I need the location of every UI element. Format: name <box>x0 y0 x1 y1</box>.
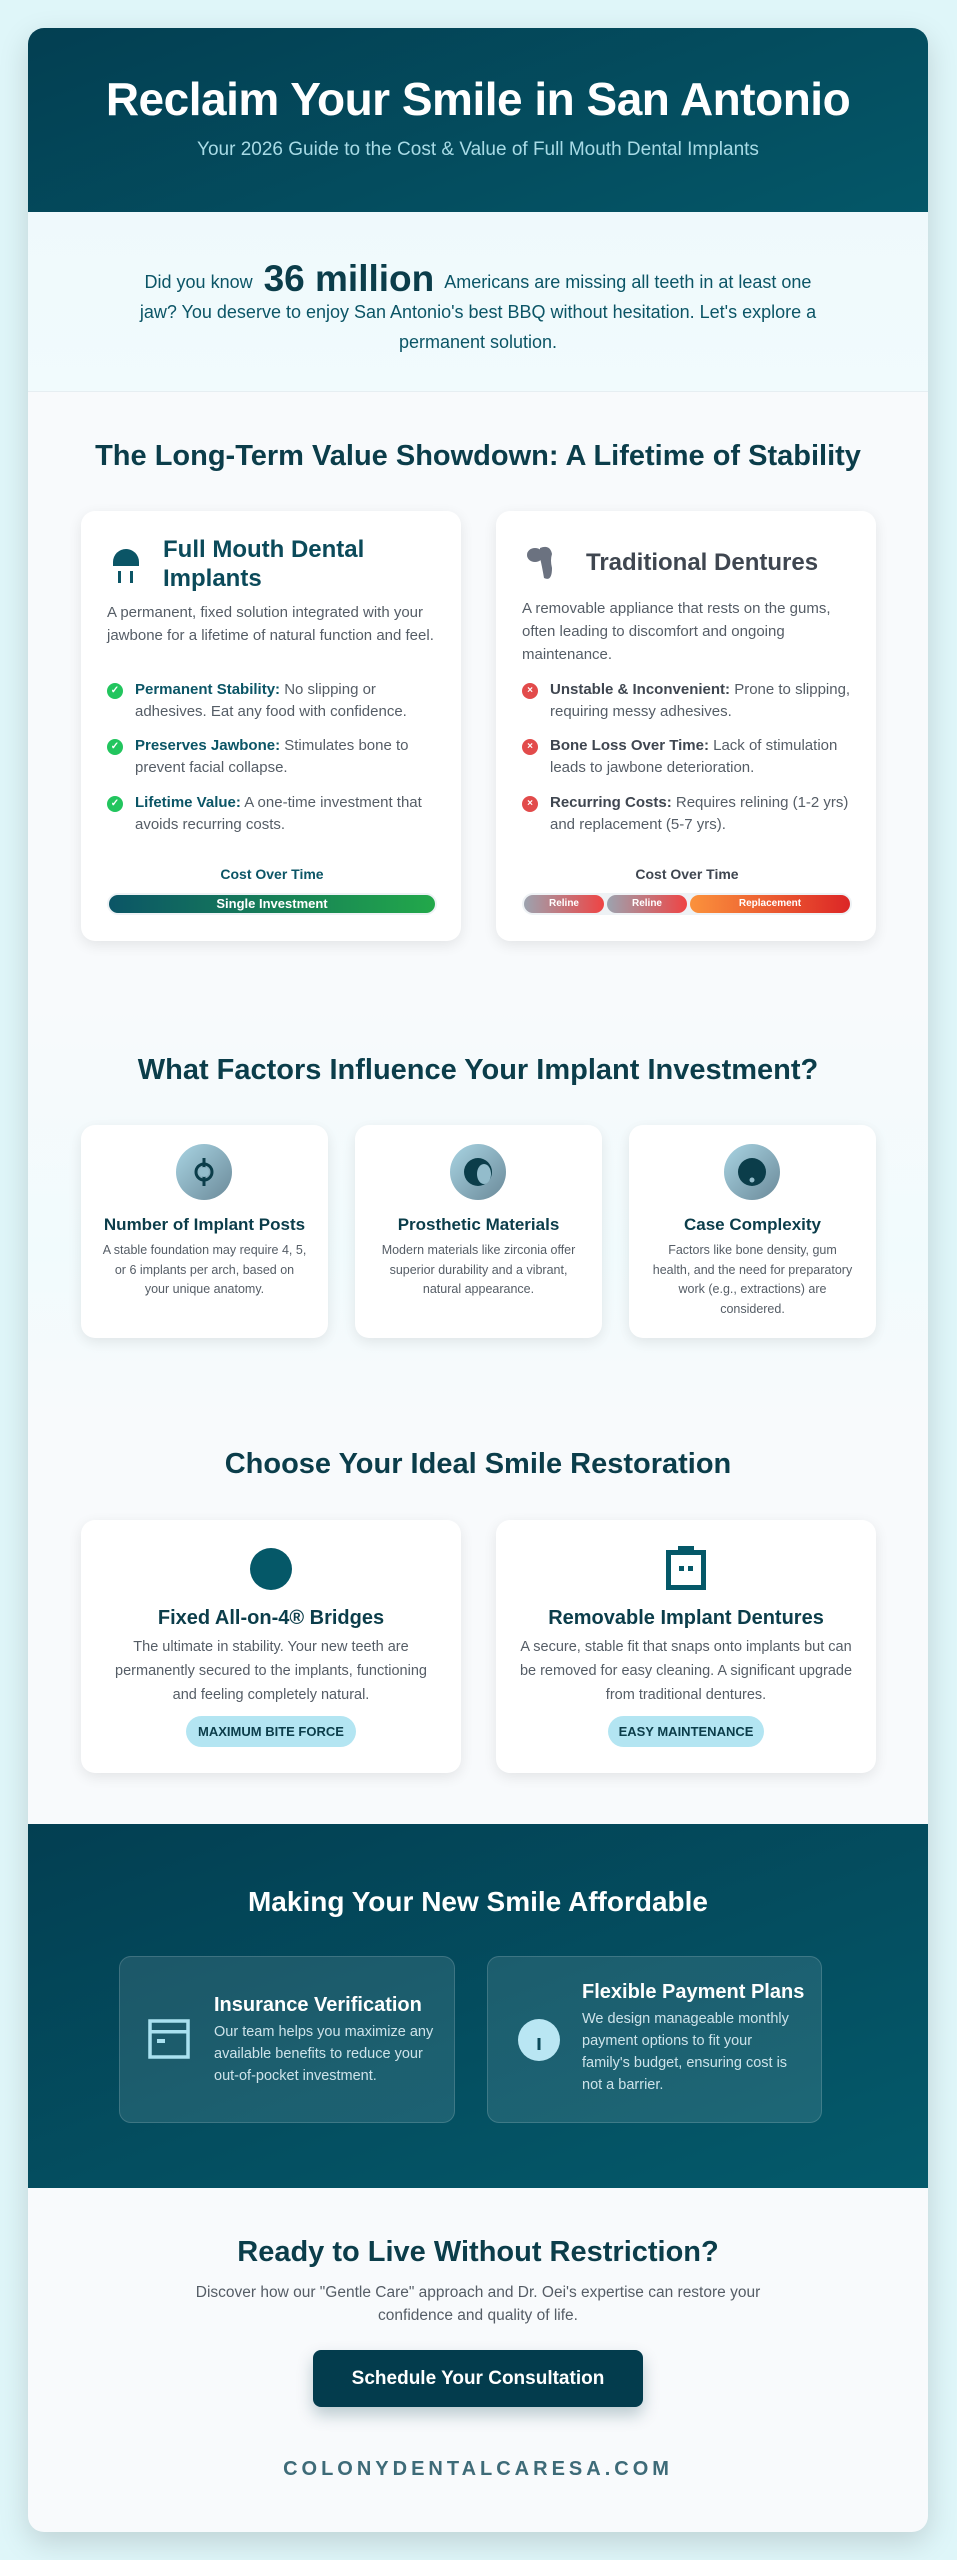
CTA text: Discover how our "Gentle Care" approach and Dr. Oei's expertise can restore your confidence and quality of life. <box>196 2284 760 2324</box>
panel: implants: Lifetime Value: A one-time investment that avoids recurring costs. <box>135 794 422 833</box>
title: Reclaim Your Smile in San Antonio <box>106 73 850 125</box>
description: A removable appliance that rests on the gums, often leading to discomfort and ongoing maintenance. <box>522 600 831 663</box>
icon: circle <box>250 1548 292 1590</box>
title: Flexible Payment Plans <box>582 1981 804 2003</box>
panel: insurance <box>119 1956 455 2123</box>
text: Modern materials like zirconia offer superior durability and a vibrant, natural appearance. <box>382 1243 575 1296</box>
title: Prosthetic Materials <box>398 1215 559 1234</box>
intro section <box>28 212 928 392</box>
text: We design manageable monthly payment options to fit your family's budget, ensuring cost is not a barrier. <box>582 2011 789 2093</box>
cost over time bar: Reline <box>632 898 662 909</box>
section heading: factors: What Factors Influence Your Implant Investment? <box>138 1054 818 1086</box>
title: Case Complexity <box>684 1215 821 1234</box>
title: Insurance Verification <box>214 1994 422 2016</box>
bullet list <box>522 681 850 833</box>
icon <box>176 1144 232 1200</box>
icon: denture <box>527 546 552 579</box>
section heading: restoration: Choose Your Ideal Smile Restoration <box>225 1448 731 1480</box>
cost over time bar <box>107 866 437 915</box>
CTA button <box>313 2350 643 2407</box>
text: Our team helps you maximize any available benefits to reduce your out-of-pocket investment. <box>214 2024 433 2084</box>
bullet list: Bone Loss Over Time: Lack of stimulation leads to jawbone deterioration. <box>550 737 837 776</box>
text: A stable foundation may require 4, 5, or 6 implants per arch, based on your unique anatomy. <box>103 1243 306 1296</box>
title: Fixed All-on-4® Bridges <box>158 1607 384 1629</box>
cost over time bar: Cost Over Time <box>635 866 739 882</box>
text: Factors like bone density, gum health, and the need for preparatory work (e.g., extractions) are considered. <box>653 1243 852 1316</box>
card title: Traditional Dentures <box>586 549 818 576</box>
card title: Full Mouth Dental <box>163 536 364 563</box>
cost over time bar: Cost Over Time <box>220 866 324 882</box>
icon <box>724 1144 780 1200</box>
panel: complexity <box>629 1125 876 1338</box>
title: Removable Implant Dentures <box>548 1607 824 1629</box>
intro text: Did you know 36 million Americans are missing all teeth in at least one jaw? You deserve to enjoy San Antonio's best BBQ without hesitation. Let's explore a permanent solution. <box>140 258 816 352</box>
title: Number of Implant Posts <box>104 1215 305 1234</box>
icon <box>450 1144 506 1200</box>
bullet list: × <box>527 798 533 809</box>
heading: Making Your New Smile Affordable <box>248 1886 708 1917</box>
bullet list: × <box>527 741 533 752</box>
icon: box <box>666 1546 706 1590</box>
panel: implant posts <box>81 1125 328 1338</box>
bullet list: Preserves Jawbone: Stimulates bone to prevent facial collapse. <box>135 737 408 776</box>
affordability section <box>28 1824 928 2188</box>
panel: implants <box>81 511 461 941</box>
CTA heading: Ready to Live Without Restriction? <box>237 2236 719 2268</box>
panel: dentures: Recurring Costs: Requires relining (1-2 yrs) and replacement (5-7 yrs). <box>550 794 848 833</box>
card title: Implants <box>163 565 262 592</box>
description: A permanent, fixed solution integrated with your jawbone for a lifetime of natural function and feel. <box>107 604 434 644</box>
website: COLONYDENTALCARESA.COM <box>283 2458 673 2480</box>
text: A secure, stable fit that snaps onto implants but can be removed for easy cleaning. A significant upgrade from traditional dentures. <box>520 1639 852 1703</box>
badge: EASY MAINTENANCE <box>619 1724 753 1739</box>
badge <box>608 1716 764 1747</box>
cost over time bar: Replacement <box>739 898 801 909</box>
subtitle: Your 2026 Guide to the Cost & Value of Full Mouth Dental Implants <box>197 139 759 160</box>
bullet list: ✓ <box>111 798 119 809</box>
icon: implant <box>113 549 139 583</box>
bullet list: Permanent Stability: No slipping or adhesives. Eat any food with confidence. <box>135 681 407 720</box>
badge <box>186 1716 356 1747</box>
bullet list: ✓ <box>111 685 119 696</box>
bullet list: Unstable & Inconvenient: Prone to slipping, requiring messy adhesives. <box>550 681 850 720</box>
bullet list: × <box>527 685 533 696</box>
panel: removable <box>496 1520 876 1773</box>
card title <box>163 536 364 592</box>
header <box>28 28 928 212</box>
panel: dentures <box>496 511 876 941</box>
bullet list <box>107 681 422 833</box>
cost over time bar <box>522 866 852 915</box>
factors section <box>28 996 928 1424</box>
text: The ultimate in stability. Your new teeth are permanently secured to the implants, functioning and feeling completely natural. <box>115 1639 427 1703</box>
icon: card <box>148 2019 190 2059</box>
CTA button: Schedule Your Consultation <box>352 2368 604 2389</box>
icon: coin <box>518 2019 560 2061</box>
section heading: value showdown: The Long-Term Value Showdown: A Lifetime of Stability <box>95 440 861 472</box>
badge: MAXIMUM BITE FORCE <box>198 1724 344 1739</box>
cost over time bar: Reline <box>549 898 579 909</box>
cost over time bar: Single Investment <box>216 896 328 911</box>
panel: payment plans <box>487 1956 822 2123</box>
panel: fixed bridges <box>81 1520 461 1773</box>
panel: materials <box>355 1125 602 1338</box>
bullet list: ✓ <box>111 741 119 752</box>
